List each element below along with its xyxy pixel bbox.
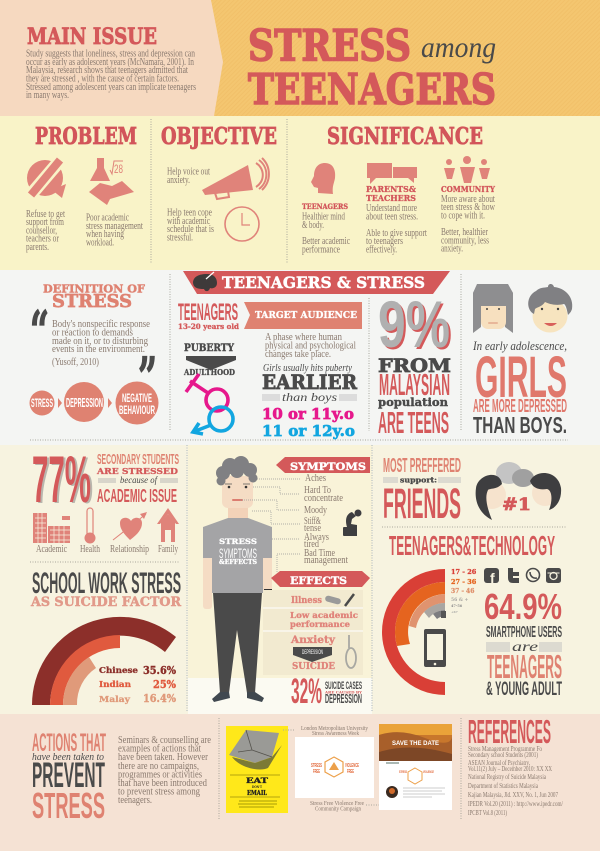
stat: 77 percent (32, 442, 93, 517)
labels: stress categories: Relationship (110, 544, 149, 555)
chart: age rings: 47-56 (451, 604, 463, 608)
icon: megaphone (202, 158, 269, 199)
text block: community: community, less (441, 236, 489, 246)
text block: community: teen stress & how (441, 202, 496, 213)
stat: nine percent: FROM (378, 355, 451, 377)
caption: london met: Stress Awareness Week (312, 730, 360, 737)
chart: suicide factor arcs: 16.4% (143, 692, 176, 705)
text: most preferred support friends (383, 455, 461, 528)
icon: flask and book (89, 158, 134, 205)
text block: teenagers: Healthier mind (302, 212, 345, 222)
text: girls hit puberty earlier: 10 or 11y.o (262, 405, 354, 423)
text: girls hit puberty earlier: than boys (282, 390, 337, 404)
poster: eat don't email: EAT (246, 776, 269, 785)
labels: stress categories: Family (158, 544, 178, 555)
text block: definition: (Yusoff, 2010) (52, 357, 99, 368)
list: effects: performance (290, 620, 351, 630)
heading: definition of stress (43, 282, 146, 312)
flow: stress to depression to negative behaviour: STRESS (31, 396, 53, 410)
text: actions to prevent stress: STRESS (32, 785, 105, 826)
caption: community campaign (310, 800, 364, 812)
panel: definition and teenagers and stress (0, 270, 600, 445)
panel: definition and teenagers and stress: ARE TEENS (378, 405, 449, 440)
text block: community (441, 184, 496, 254)
list: references (468, 745, 563, 817)
text: most preferred support friends: support: (400, 476, 437, 484)
chart: suicide factor arcs: Chinese (99, 666, 139, 676)
text block: community: Better, healthier (441, 227, 488, 238)
icon: heart with arrow (113, 512, 147, 540)
panel: symptoms figure column: SUICIDE CASES (325, 680, 362, 692)
text block: problem one: Refuse to get (26, 209, 65, 220)
labels: stress categories (36, 544, 178, 555)
text block: objective one (167, 166, 210, 186)
flow: stress to depression to negative behaviour (30, 382, 158, 424)
text block: main issue: Stressed among adolescent years can implicate teenagers (26, 82, 196, 93)
text: girls more depressed: In early adolescence, (472, 338, 567, 353)
icon: pills (324, 594, 354, 606)
text block: community: anxiety. (441, 244, 463, 254)
text: secondary students: ARE STRESSED (96, 467, 179, 477)
panel: actions and references (0, 713, 600, 851)
panel: academic stress: SECONDARY STUDENTS (97, 451, 179, 468)
illustration: girl face (473, 284, 513, 333)
list: references: Secondary school Students (2001) (468, 751, 538, 759)
chart: suicide factor arcs: 35.6% (143, 664, 176, 677)
panel: academic stress: 77% (32, 442, 91, 516)
panel: academic stress: 77% (34, 443, 93, 517)
text block: puberty phase: A phase where human (265, 332, 342, 343)
text block: definition (52, 319, 150, 368)
panel: header (0, 0, 600, 116)
panel: actions and references: PREVENT (32, 756, 105, 795)
list: symptoms: management (304, 555, 348, 566)
text block: problem two: Poor academic (86, 212, 129, 224)
heading: definition of stress: DEFINITION OF (43, 282, 146, 296)
icon: community (444, 156, 490, 183)
list: references: Vol.11(2) July – December 2010: XX XX (468, 765, 552, 773)
text block: actions: programmes or activities (118, 770, 202, 780)
heading: school work stress: AS SUICIDE FACTOR (30, 595, 181, 610)
illustration: friends talking (476, 462, 561, 520)
list: symptoms: Moody (304, 505, 327, 516)
panel: definition and teenagers and stress: MALAYSIAN (379, 367, 450, 402)
icon: building (33, 513, 70, 543)
text block: parents and teachers: TEACHERS (366, 194, 416, 204)
text block: teenagers (302, 202, 350, 256)
text block: objective two: stressful. (167, 232, 193, 244)
text: secondary students (96, 451, 179, 506)
text block: objective two (167, 208, 214, 244)
icon: thermometer (84, 508, 96, 544)
banner: effects: EFFECTS (290, 575, 347, 587)
title (248, 22, 496, 114)
list: symptoms: Hard To (304, 485, 331, 496)
list: effects: Illness (291, 596, 322, 606)
list: symptoms: Always (304, 532, 329, 543)
list: effects: SUICIDE (292, 662, 335, 672)
text block: teenagers: performance (302, 244, 340, 256)
text block: main issue: Malaysia, research shows that teenagers admitted that (26, 65, 188, 76)
icon: flask and book: 28 (114, 162, 123, 176)
text block: main issue: occur as early as adolescent years (McNamara, 2001). In (26, 57, 194, 68)
text: girls hit puberty earlier (262, 363, 357, 440)
text block: definition: Body's nonspecific response (52, 319, 150, 330)
text block: teenagers: TEENAGERS (302, 202, 348, 211)
list: symptoms: Bad Time (304, 548, 335, 559)
text: teenagers 13-20 (178, 299, 240, 331)
chart: age rings: 17 - 26 (451, 568, 477, 576)
stat: nine percent (378, 287, 452, 440)
caption: community campaign: Community Campaign (315, 806, 362, 812)
banner: target audience: TARGET AUDIENCE (255, 311, 357, 321)
panel: academic stress: SCHOOL WORK STRESS (32, 567, 181, 600)
text block: actions: to prevent stress among (118, 786, 200, 798)
banner: symptoms (276, 457, 370, 473)
text block: problem two: stress management (86, 221, 143, 232)
text: girls more depressed (472, 338, 567, 438)
icon: house (157, 508, 179, 542)
poster: eat don't email: DON'T (252, 784, 262, 789)
icons: social media (484, 568, 561, 586)
text: secondary students: ACADEMIC ISSUE (97, 486, 177, 506)
heading: problem: PROBLEM (35, 123, 137, 150)
text block: actions: there are no campaigns, (118, 761, 199, 772)
chart: suicide factor arcs (32, 617, 176, 705)
heading: school work stress (30, 567, 181, 610)
text: actions to prevent stress: have been taken to (32, 752, 104, 763)
text block: main issue (26, 48, 196, 101)
logo card: stress free violence free: STRESS (311, 763, 322, 769)
text block: teenagers: & body. (302, 220, 324, 231)
list: effects: Anxiety (290, 635, 336, 646)
card: save the date: VIOLENCE (423, 769, 434, 774)
list: references: IPEDR Vol.20 (2011) : http://www.ipedr.com/ (468, 800, 563, 808)
text block: objective one: Help voice out (167, 166, 210, 178)
heading: significance: SIGNIFICANCE (327, 123, 483, 150)
poster: eat don't email: EMAIL (247, 790, 268, 797)
flow: stress to depression to negative behaviour: DEPRESSION (66, 395, 103, 410)
text block: puberty phase: physical and psychological (265, 340, 356, 352)
text block: problem two: workload. (86, 238, 114, 248)
text block: definition: events in the environment. (52, 344, 145, 355)
icon: head (311, 163, 335, 194)
text block: main issue: in many ways. (26, 90, 69, 101)
text block: actions: examples of actions that (118, 744, 201, 754)
list: symptoms: concentrate (304, 493, 343, 504)
panel: academic stress (0, 442, 600, 714)
labels: stress categories: Health (80, 544, 100, 555)
card: save the date (379, 724, 452, 810)
text: girls hit puberty earlier: 11 or 12y.o (262, 422, 355, 440)
panel: actions and references: ACTIONS THAT (32, 729, 106, 757)
caption: london met: London Metropolitan University (301, 725, 369, 732)
title: STRESS (248, 22, 411, 72)
labels: stress categories: Academic (36, 544, 67, 555)
text block: definition: made on it, or to disturbing (52, 336, 148, 347)
caption: london met (301, 725, 369, 737)
poster: eat don't email (226, 726, 288, 813)
text block: teenagers: Better academic (302, 236, 350, 247)
list: effects: Low academic (290, 611, 358, 621)
list: symptoms: Aches (305, 473, 326, 484)
text block: parents and teachers: Able to give support (366, 228, 427, 239)
logo card: stress free violence free (295, 737, 374, 798)
chart: suicide factor arcs: Indian (99, 680, 131, 690)
chart: age rings: 56 & + (451, 597, 468, 603)
flow: stress to depression to negative behaviour: NEGATIVE (122, 391, 152, 405)
stat: nine percent: 9% (380, 289, 452, 363)
panel: academic stress: FRIENDS (383, 480, 461, 528)
list: references: IPCBT Vol.8 (2011) (468, 809, 507, 817)
text block: actions: have been taken. However (118, 752, 209, 763)
text block: actions: that have been introduced (118, 778, 207, 789)
icon: closing quote: ” (138, 345, 157, 409)
panel: effects (263, 571, 370, 675)
text block: problem two: when having (86, 229, 124, 240)
text block: problem one: parents. (26, 242, 49, 253)
stat: nine percent: 9% (378, 287, 450, 361)
panel: problem objective significance (0, 116, 600, 270)
text block: actions: teenagers. (118, 795, 152, 806)
text block: problem two (86, 212, 143, 248)
text block: objective one: anxiety. (167, 175, 190, 186)
text block: parents and teachers: Understand more (366, 203, 417, 214)
heading: main issue: MAIN ISSUE (27, 24, 157, 50)
banner: symptoms: SYMPTOMS (290, 461, 366, 473)
list: references: ASEAN Journal of Psychiatry, (468, 759, 530, 767)
text block: main issue: they are stressed , with the cause of certain factors. (26, 74, 179, 84)
flow: stress to depression to negative behaviour: BEHAVIOUR (119, 403, 155, 417)
banner: target audience (244, 302, 362, 329)
icons: social media: f (490, 570, 495, 586)
illustration: stressed teen: SYMPTOMS (219, 545, 257, 561)
icon: clock (225, 207, 259, 241)
text: secondary students: because of (120, 475, 158, 485)
icon: female symbol (186, 374, 228, 411)
list: references: Stress Management Programme Fo (468, 745, 542, 753)
chart: age rings: 27 - 36 (451, 578, 477, 586)
diagram: puberty to adulthood (183, 343, 236, 377)
text block: definition: or reaction to demands (52, 328, 133, 338)
icon: brain (193, 272, 217, 291)
panel: academic stress: MOST PREFFERED (383, 455, 461, 477)
chart: age rings (382, 568, 477, 695)
list: references: Department of Statistics Malaysia (468, 782, 539, 790)
icon: smartphone (424, 629, 446, 667)
text block: puberty phase: changes take place. (265, 349, 331, 360)
text: girls hit puberty earlier: Girls usually hits puberty (263, 363, 352, 374)
text block: parents and teachers: PARENTS& (366, 185, 416, 195)
text block: parents and teachers: effectively. (366, 244, 397, 256)
list: references: National Registry of Suicide Malaysia (468, 773, 547, 781)
stat: smartphone users: are (512, 640, 538, 655)
heading: objective: OBJECTIVE (161, 123, 277, 150)
text block: problem one: teachers or (26, 234, 59, 244)
caption: community campaign: Stress Free Violence Free (310, 800, 364, 807)
text block: problem one: support from (26, 217, 64, 228)
logo card: stress free violence free: VIOLENCE (345, 763, 359, 769)
panel: symptoms figure column (187, 445, 372, 714)
text block: problem one (26, 209, 65, 253)
list: symptoms: tired (304, 539, 319, 550)
text block: problem one: counsellor, (26, 226, 57, 236)
text block: parents and teachers: to teenagers (366, 236, 403, 247)
stat: 32 percent: ARE CAUSED BY (324, 690, 363, 694)
text: girls hit puberty earlier: EARLIER (262, 370, 357, 394)
illustration: friends talking: #1 (502, 495, 531, 515)
list: references: Kajian Malaysia, Jld. XXV, No. 1, Jun 2007 (468, 791, 558, 799)
stat: nine percent: population (378, 396, 448, 409)
illustration: stressed teen: &EFFECTS (219, 559, 257, 566)
text block: parents and teachers: about teen stress. (366, 212, 418, 222)
text block: actions: Seminars & counselling are (118, 735, 211, 746)
stat: smartphone users (484, 586, 562, 700)
card: save the date: STRESS (399, 769, 407, 774)
illustration: boy face (528, 284, 572, 332)
icon: male symbol (193, 407, 233, 434)
illustration: stressed teen (203, 456, 272, 702)
icon: noose (346, 635, 356, 668)
diagram: puberty to adulthood: PUBERTY (184, 343, 235, 354)
text block: actions (118, 735, 211, 806)
text block: community: to cope with it. (441, 210, 485, 222)
text block: puberty phase (265, 332, 356, 360)
diagram: puberty to adulthood: ADULTHOOD (183, 367, 235, 377)
list: symptoms (304, 473, 348, 566)
text block: main issue: Study suggests that loneliness, stress and depression can (26, 48, 195, 60)
chart: suicide factor arcs: 25% (153, 678, 176, 691)
icon: speech bubbles (367, 163, 417, 184)
title: TEENAGERS (248, 65, 496, 114)
list: effects: DEPRESSION (302, 650, 323, 656)
list: symptoms: tense (304, 523, 321, 534)
card: save the date: SAVE THE DATE (392, 741, 439, 747)
panel: definition and teenagers and stress: TEENAGERS (178, 299, 238, 326)
text block: objective two: Help teen cope (167, 208, 212, 218)
text block: community: More aware about (441, 194, 495, 205)
text block: parents and teachers (366, 185, 427, 256)
illustration: stressed teen: STRESS (219, 537, 257, 546)
icon: crossed-out speech bubbles (27, 157, 66, 198)
text block: objective two: schedule that is (167, 224, 214, 235)
text block: community: COMMUNITY (441, 184, 495, 194)
banner: teenagers and stress: TEENAGERS & STRESS (222, 273, 425, 292)
list: effects (290, 596, 358, 672)
list: symptoms: Stiff& (304, 516, 321, 527)
heading: definition of stress: STRESS (52, 291, 132, 312)
panel: symptoms figure column: DEPRESSION (325, 691, 362, 706)
chart: suicide factor arcs: Malay (99, 695, 131, 705)
logo card: stress free violence free: FREE (313, 769, 320, 775)
title: among (421, 31, 496, 64)
stat: smartphone users: 64.9% (484, 586, 562, 627)
text block: objective two: with academic (167, 216, 210, 227)
chart: age rings: +67 (451, 610, 458, 614)
text: actions to prevent stress (32, 729, 106, 826)
icon: opening quote: “ (30, 299, 49, 363)
logo card: stress free violence free: FREE (347, 769, 354, 775)
chart: age rings: 37 - 46 (451, 588, 474, 595)
icon: sitting figure (343, 510, 362, 536)
stat: 32 percent: 32% (291, 672, 322, 711)
text: teenagers 13-20: 13-20 years old (178, 322, 240, 331)
banner: teenagers and stress (183, 271, 450, 294)
